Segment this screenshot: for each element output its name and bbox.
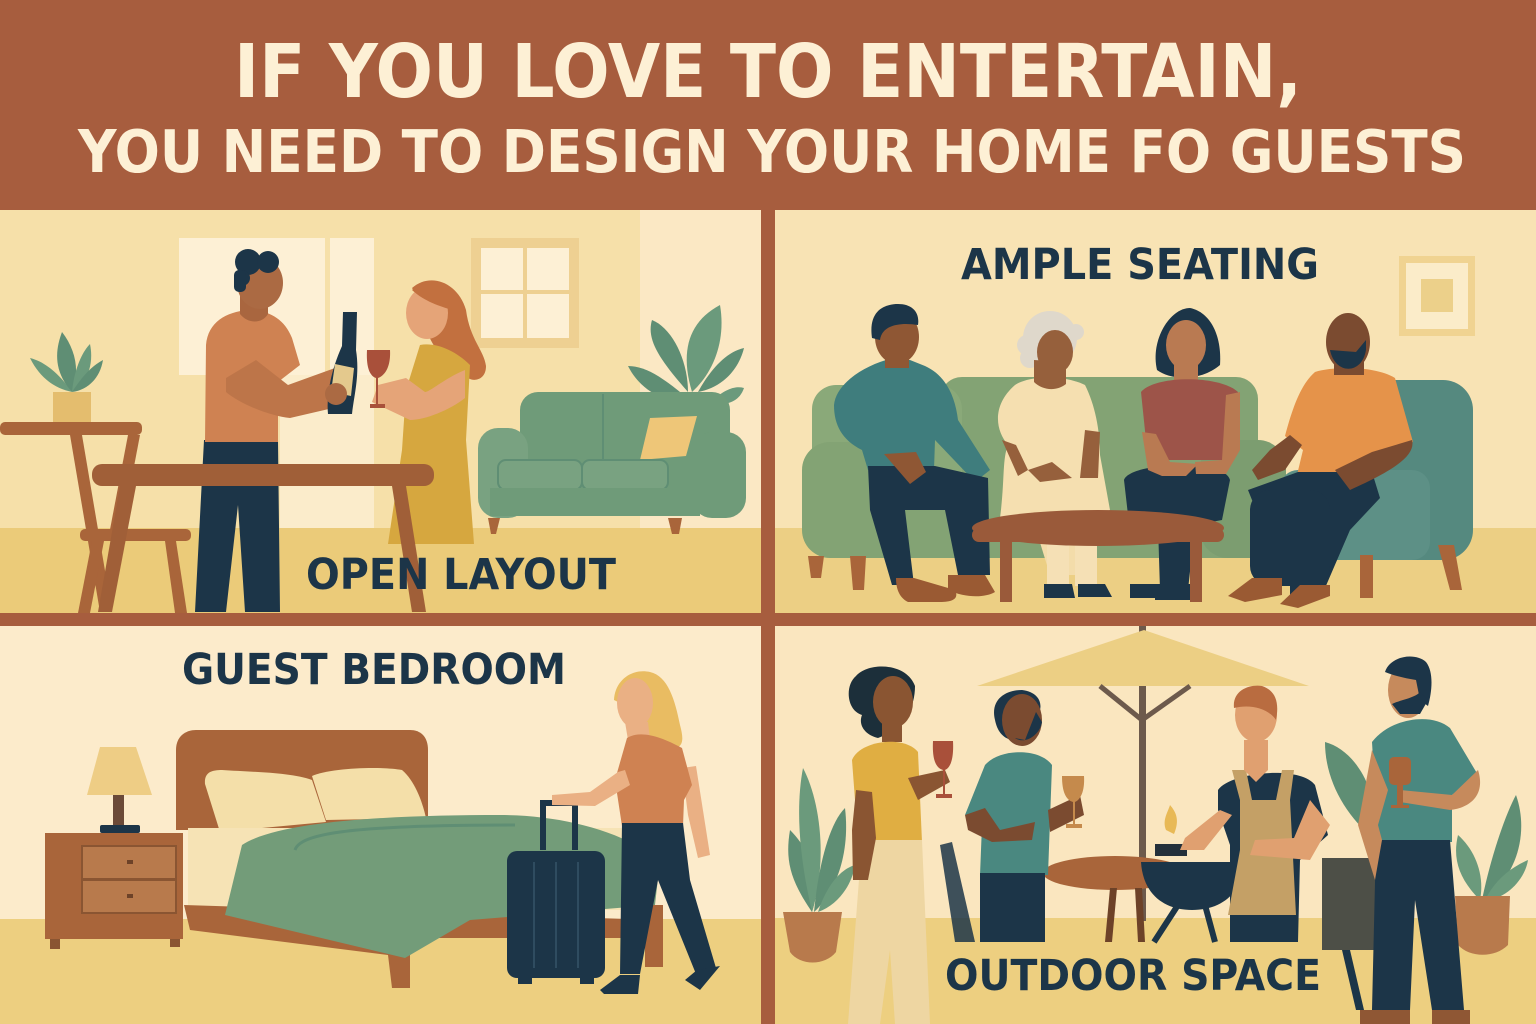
icon: teal armchair bbox=[1280, 380, 1473, 598]
title bbox=[77, 29, 1466, 186]
label: outdoor space: OUTDOOR SPACE bbox=[945, 951, 1321, 1001]
icon: grill bbox=[1141, 805, 1244, 942]
icon: nightstand bbox=[45, 833, 183, 949]
panel: open layout bbox=[0, 210, 761, 613]
label: ample seating: AMPLE SEATING bbox=[961, 240, 1319, 290]
host neck bbox=[240, 288, 268, 322]
icon: bed bbox=[176, 730, 663, 988]
icon: doorway light bbox=[280, 375, 374, 528]
icon: sofa bbox=[478, 305, 746, 534]
icon: side table and chair bbox=[0, 422, 191, 613]
icon: lamp bbox=[87, 747, 152, 833]
icon: green sofa bbox=[802, 377, 1286, 590]
icon: dining table bbox=[92, 464, 434, 612]
person: woman with wine bbox=[848, 667, 953, 1024]
person: man in teal t-shirt bbox=[965, 690, 1084, 942]
person: older woman bbox=[998, 311, 1112, 598]
label: open layout: OPEN LAYOUT bbox=[306, 550, 617, 600]
host with wine bottle bbox=[195, 249, 357, 612]
icon: right plant bbox=[1325, 742, 1528, 955]
icon: wall art bbox=[1399, 256, 1475, 336]
icon: bright window behind host bbox=[179, 238, 374, 375]
panel: outdoor space bbox=[775, 626, 1536, 1024]
title: IF YOU LOVE TO ENTERTAIN, bbox=[234, 29, 1302, 115]
host head bbox=[237, 257, 283, 309]
host trousers bbox=[195, 440, 280, 612]
icon: coffee table bbox=[972, 510, 1224, 602]
label: guest bedroom: GUEST BEDROOM bbox=[182, 645, 566, 695]
host arm bbox=[226, 360, 346, 418]
wine bottle bbox=[328, 312, 357, 414]
person: man with apron at grill bbox=[1180, 686, 1330, 942]
icon: suitcase bbox=[507, 800, 605, 984]
person: woman in maroon top bbox=[1124, 308, 1240, 600]
icon: patio umbrella bbox=[977, 626, 1309, 921]
panel: ample seating bbox=[775, 210, 1536, 613]
host hand bbox=[325, 383, 347, 405]
person: man in teal sweater bbox=[834, 304, 995, 602]
host t-shirt bbox=[205, 310, 300, 442]
panel: guest bedroom bbox=[0, 626, 761, 1024]
white curly hair bbox=[1017, 311, 1084, 368]
person: bearded man with beer bbox=[1358, 657, 1480, 1024]
host hair bbox=[234, 249, 279, 292]
icon: left plant bbox=[783, 768, 855, 962]
icon: small window bbox=[471, 238, 579, 348]
guest with wine glass bbox=[367, 280, 486, 544]
icon: patio table and chair bbox=[940, 842, 1384, 1010]
icon: potted plant on table bbox=[30, 332, 103, 422]
person: guest with suitcase bbox=[552, 671, 720, 994]
person: man in orange shirt bbox=[1228, 313, 1413, 608]
